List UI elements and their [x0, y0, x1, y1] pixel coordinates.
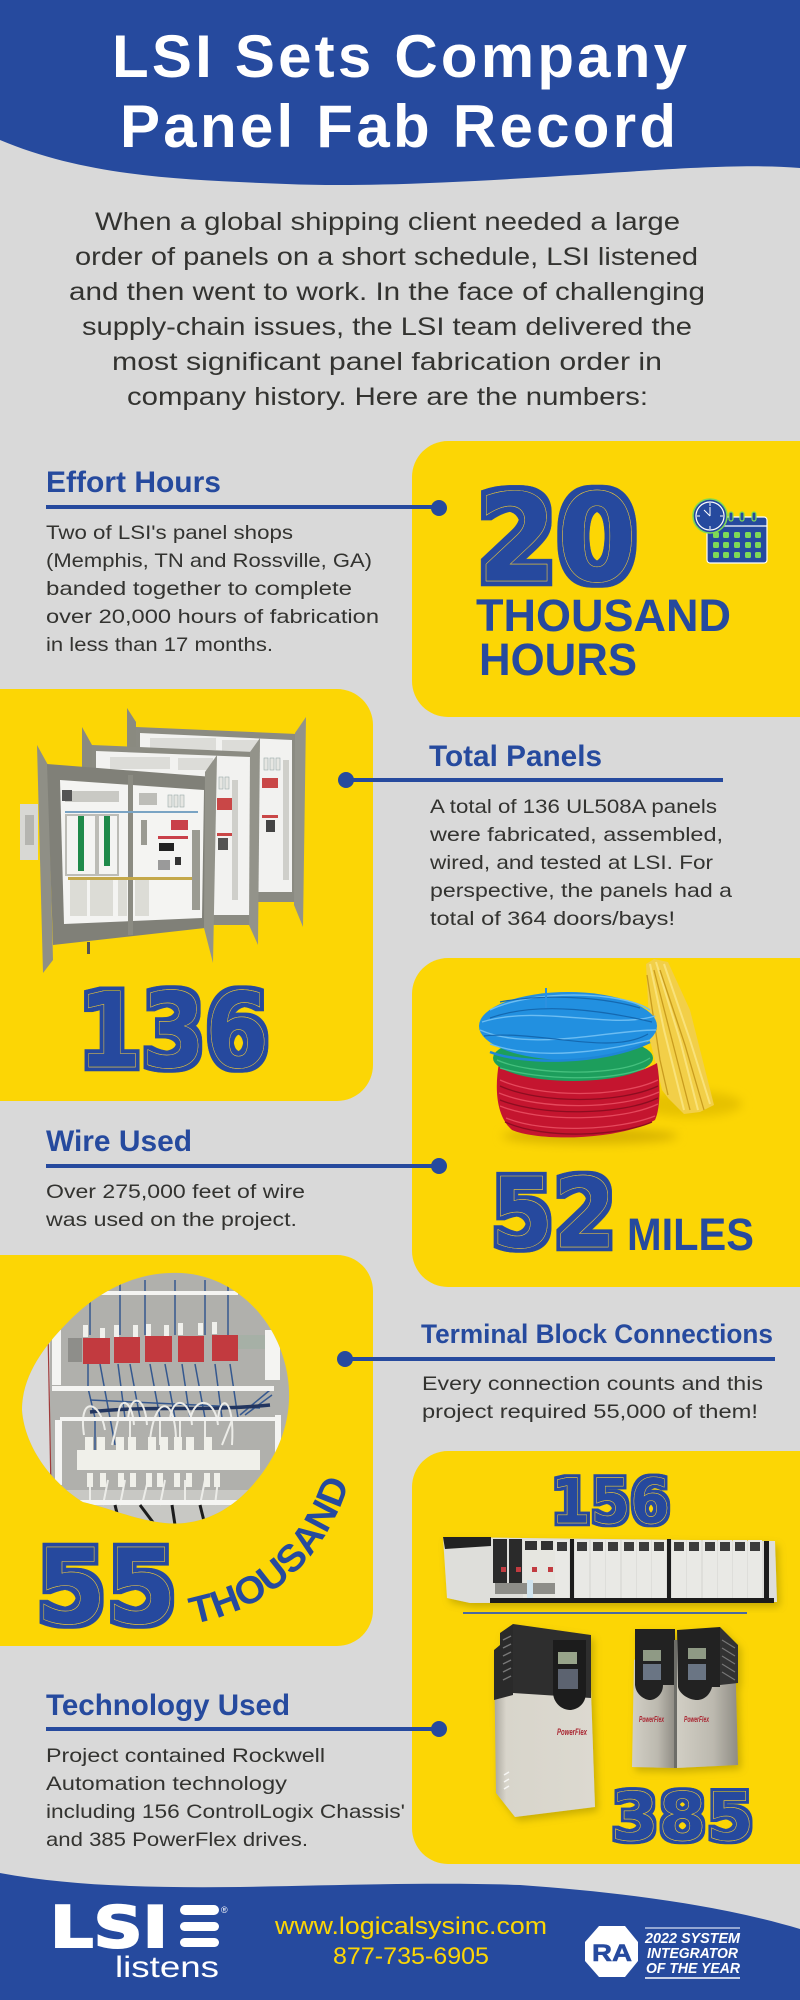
io modules: [555, 1540, 762, 1599]
photo: paired powerflex drives: [632, 1627, 738, 1768]
green wire coil: [493, 1035, 653, 1081]
number: 20: 20: [477, 468, 637, 610]
body: wire used: was used on the project.: [45, 1209, 297, 1231]
label: thousand hours: THOUSAND: [476, 590, 731, 641]
number: 136: 136: [78, 970, 269, 1092]
body: total panels: were fabricated, assembled,: [429, 824, 723, 846]
red relay blocks: [83, 1335, 238, 1364]
intro text: company history. Here are the numbers:: [127, 383, 648, 411]
logo: lsi listens: listens: [115, 1951, 219, 1984]
body: effort hours: Two of LSI's panel shops: [46, 522, 293, 544]
powerflex badge: PowerFlex: [557, 1727, 588, 1737]
front cabinet: [20, 745, 217, 973]
powerflex badges: [639, 1715, 709, 1724]
logo: rockwell award badge: 2022 SYSTEM: [644, 1930, 740, 1947]
logo: lsi listens: [50, 1895, 228, 1984]
label: thousand hours: HOURS: [479, 634, 637, 685]
contact details: 877-735-6905: [333, 1943, 489, 1970]
heading: effort hours: Effort Hours: [46, 466, 221, 499]
number: 55: 55: [36, 1526, 177, 1648]
body: terminal block connections: Every connection counts and this: [422, 1373, 763, 1395]
intro text: order of panels on a short schedule, LSI listened: [75, 243, 698, 271]
wire bundles: [88, 1280, 272, 1450]
yellow card: technology: [412, 1451, 800, 1864]
black wires: [115, 1505, 205, 1525]
body: total panels: perspective, the panels had a: [430, 880, 732, 902]
terminal strip: [77, 1437, 260, 1487]
intro text: [69, 208, 705, 411]
panel: total panels: [0, 689, 732, 1101]
body: effort hours: banded together to complete: [46, 578, 352, 600]
body: total panels: A total of 136 UL508A panels: [430, 796, 717, 818]
back cabinet: [127, 708, 306, 927]
number: 156: 156: [551, 1465, 670, 1538]
wire ducts: [52, 1291, 281, 1505]
contact details: www.logicalsysinc.com: [274, 1913, 547, 1940]
label: curved thousand: THOUSAND: [187, 1478, 346, 1622]
body: technology used: including 156 ControlLogix Chassis': [46, 1801, 405, 1823]
divider: [463, 1612, 747, 1614]
yellow wire coil: [646, 959, 714, 1114]
panel: effort hours: [46, 441, 800, 717]
photo: controllogix chassis: [443, 1537, 777, 1603]
yellow card: 55 thousand: [0, 1255, 373, 1646]
logo: rockwell award badge: INTEGRATOR: [647, 1945, 738, 1962]
icon: calendar and clock: [693, 499, 767, 563]
heading: terminal block connections: Terminal Block Connections: [421, 1319, 773, 1349]
photo: electrical cabinets: [20, 708, 306, 973]
logo: rockwell award badge: OF THE YEAR: [646, 1960, 740, 1977]
panel: terminal block connections: [0, 1255, 775, 1648]
body: technology used: Automation technology: [46, 1773, 287, 1795]
title: Panel Fab Record: [120, 93, 676, 160]
number: 52: 52: [491, 1157, 616, 1270]
powerflex badges: PowerFlex: [684, 1715, 709, 1724]
body: wire used: [45, 1181, 305, 1231]
connector: effort hours: [46, 500, 447, 516]
heading: total panels: Total Panels: [429, 740, 602, 773]
middle cabinet: [82, 727, 260, 945]
logo: lsi listens: ®: [221, 1905, 228, 1915]
intro text: supply-chain issues, the LSI team delivered the: [82, 313, 692, 341]
body: technology used: Project contained Rockwell: [46, 1745, 325, 1767]
yellow card: 52 miles: [412, 958, 800, 1287]
body: total panels: [429, 796, 732, 930]
label: miles: MILES: [627, 1209, 754, 1260]
intro text: and then went to work. In the face of challenging: [69, 278, 705, 306]
body: technology used: and 385 PowerFlex drives.: [46, 1829, 308, 1851]
panel: technology used: [46, 1451, 800, 1864]
heading: wire used: Wire Used: [46, 1125, 192, 1158]
photo: large powerflex drive: [494, 1624, 595, 1817]
powerflex badges: PowerFlex: [639, 1715, 664, 1724]
label: thousand hours: [476, 590, 731, 685]
logo: lsi listens: LSI: [50, 1895, 168, 1961]
body: total panels: total of 364 doors/bays!: [430, 908, 675, 930]
connector: wire used: [46, 1158, 447, 1174]
logo: rockwell award badge: [585, 1926, 740, 1978]
red wire coil: [497, 1063, 659, 1137]
body: wire used: Over 275,000 feet of wire: [46, 1181, 305, 1203]
connector: technology used: [46, 1721, 447, 1737]
yellow card: 136 panels: [0, 689, 373, 1101]
body: terminal block connections: [422, 1373, 763, 1423]
header banner: [0, 0, 800, 185]
blue wire coil: [479, 988, 657, 1061]
connector: terminal block connections: [337, 1351, 775, 1367]
yellow card: 20 thousand hours: [412, 441, 800, 717]
intro text: When a global shipping client needed a large: [95, 208, 680, 236]
number: 385: 385: [611, 1778, 754, 1856]
body: terminal block connections: project required 55,000 of them!: [422, 1401, 758, 1423]
logo: rockwell award badge: RA: [592, 1940, 632, 1967]
body: effort hours: (Memphis, TN and Rossville, GA): [46, 550, 372, 572]
body: effort hours: [46, 522, 379, 656]
body: technology used: [46, 1745, 405, 1851]
title: LSI Sets Company: [112, 23, 688, 90]
footer banner: [0, 1873, 800, 2000]
contact details: [274, 1913, 547, 1970]
body: effort hours: over 20,000 hours of fabrication: [46, 606, 379, 628]
heading: technology used: Technology Used: [46, 1689, 290, 1722]
connector: total panels: [338, 772, 723, 788]
photo: wire coils: [479, 959, 742, 1144]
photo: terminal blocks: [15, 1270, 295, 1530]
title: [112, 23, 688, 160]
body: total panels: wired, and tested at LSI. For: [429, 852, 714, 874]
panel: wire used: [45, 958, 800, 1287]
body: effort hours: in less than 17 months.: [46, 634, 273, 656]
intro text: most significant panel fabrication order in: [112, 348, 662, 376]
